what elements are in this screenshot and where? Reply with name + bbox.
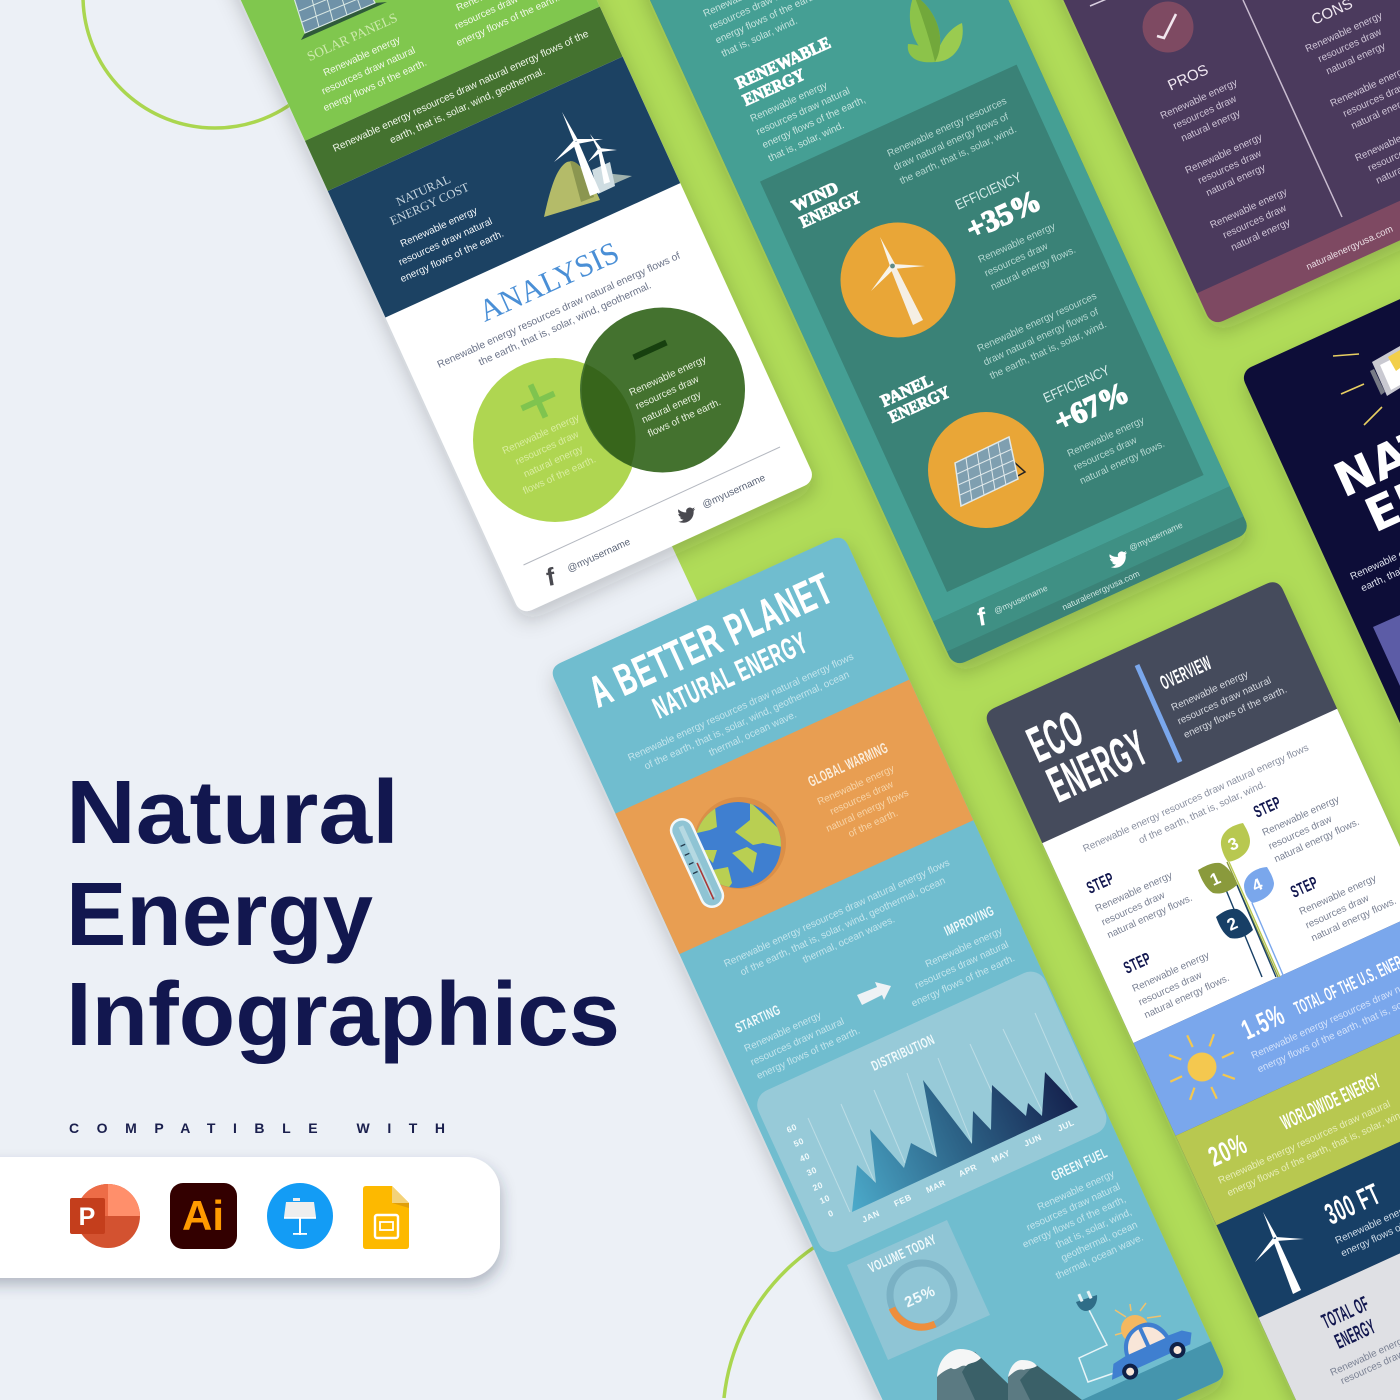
text: inner intro: the earth, that is, solar, wind. — [898, 124, 1019, 187]
step: lower left: natural energy flows. — [1143, 973, 1231, 1021]
heading: natural energy cost: NATURAL — [394, 172, 453, 209]
axis labels: MAY — [990, 1148, 1012, 1165]
text: wind paragraph: natural energy flows. — [989, 245, 1078, 293]
text: green fuel paragraph: geothermal, ocean — [1060, 1220, 1139, 1264]
text: improving paragraph: Renewable energy — [924, 926, 1004, 970]
text: plus: flows of the earth. — [521, 454, 598, 497]
step: top left: Renewable energy — [1094, 870, 1174, 915]
text: warming paragraph: Renewable energy — [816, 763, 896, 808]
title: natural energy infographics: Infographics — [66, 965, 620, 1065]
heading: natural energy cost: ENERGY COST — [388, 180, 472, 228]
block: purple section — [1373, 615, 1400, 686]
subtitle: natural energy: NATURAL ENERGY — [648, 627, 813, 725]
stat: 1.5% total of the U.S. energy: 1.5% — [1237, 999, 1290, 1045]
step: top left: natural energy flows. — [1106, 893, 1194, 941]
chart: volume today donut: VOLUME TODAY — [866, 1231, 939, 1276]
icon: powerpoint: P — [79, 1203, 95, 1231]
chart: volume today donut: 25% — [902, 1282, 938, 1311]
icon: lamp — [1333, 346, 1400, 425]
heading: solar panels: SOLAR PANELS — [305, 10, 400, 64]
panel: purple pros and cons card — [1005, 0, 1400, 326]
axis labels: 60 — [785, 1122, 799, 1135]
chart: venn diagram — [473, 308, 745, 522]
text: dark green band: earth, that is, solar, wind, geothermal. — [388, 66, 547, 146]
icon: wind turbine in orange circle — [840, 222, 956, 338]
title: natural energy infographics: Natural — [66, 763, 399, 863]
icon: sun — [1169, 1034, 1235, 1100]
text: minus: Renewable energy — [628, 354, 708, 399]
text: green fuel paragraph: energy flows of the earth, — [1021, 1194, 1128, 1251]
heading: panel energy: PANEL — [878, 371, 936, 411]
stat: efficiency +35%: EFFICIENCY — [953, 168, 1024, 213]
icon: hill with wind turbines — [544, 112, 632, 217]
text: pros list: Renewable energy — [1209, 187, 1289, 231]
heading: improving: IMPROVING — [942, 902, 996, 939]
axis labels: 0 — [826, 1208, 835, 1219]
text: solar paragraph: Renewable energy — [322, 34, 402, 79]
text: pros list: natural energy — [1229, 217, 1292, 254]
heading: green fuel: GREEN FUEL — [1049, 1144, 1110, 1184]
step: lower left: STEP — [1121, 949, 1154, 978]
text: panel paragraph: resources draw — [1072, 435, 1139, 473]
text: renewable paragraph: that is, solar, wind. — [767, 120, 846, 164]
text: pros list: natural energy — [1180, 108, 1242, 144]
text: renewable paragraph: resources draw natural — [755, 86, 852, 138]
diagram: leaf steps: 3 — [1225, 833, 1242, 855]
text: warming paragraph: natural energy flows — [825, 788, 911, 835]
text: intro: thermal, ocean wave. — [707, 709, 799, 759]
step: right: natural energy flows. — [1310, 896, 1398, 944]
text: pros list: Renewable energy — [1159, 77, 1239, 122]
icon: arrow — [857, 982, 891, 1005]
text: starting paragraph: energy flows of the earth. — [755, 1025, 862, 1082]
diagram: leaf steps: 1 — [1207, 868, 1224, 890]
axis labels: JUL — [1056, 1117, 1076, 1133]
text: green fuel paragraph: Renewable energy — [1036, 1169, 1116, 1213]
text: cons list: natural energy — [1325, 41, 1387, 77]
panel: navy natural energy card — [1240, 206, 1400, 1009]
step: top left: resources draw — [1100, 890, 1167, 928]
axis labels: 50 — [792, 1136, 806, 1149]
text: renewable paragraph: Renewable energy — [749, 80, 829, 125]
text: overview paragraph: energy flows of the earth. — [1182, 684, 1289, 741]
title: eco energy: ECO — [1019, 700, 1092, 773]
stat: efficiency +67%: +67% — [1049, 376, 1134, 438]
heading: global warming: GLOBAL WARMING — [806, 740, 891, 791]
icon: illustrator: Ai — [182, 1192, 224, 1239]
title: eco energy — [1019, 700, 1156, 813]
text: eco intro: of the earth, that is, solar, wind. — [1137, 779, 1268, 847]
text: green fuel paragraph: thermal, ocean wave. — [1054, 1232, 1145, 1282]
icon: electric car with sun and plug — [1076, 1291, 1199, 1387]
title: a better planet: A BETTER PLANET — [582, 564, 841, 717]
text: minus: flows of the earth. — [646, 397, 723, 440]
text: plus: Renewable energy — [501, 412, 581, 457]
icon: check badge — [1142, 2, 1194, 52]
text: panel intro: draw natural energy flows of — [982, 306, 1100, 368]
text: panel intro: Renewable energy resources — [976, 291, 1099, 355]
text: cons list: Renewable energy — [1304, 10, 1384, 55]
text: improving paragraph: energy flows of the earth. — [910, 953, 1017, 1010]
panel: inner dark teal — [760, 65, 1204, 592]
text: wind paragraph: Renewable energy — [977, 221, 1057, 266]
icon: wind turbine — [1255, 1212, 1304, 1294]
text: starting paragraph: resources draw natural — [749, 1016, 846, 1068]
panel: app icons pill — [0, 1157, 500, 1278]
text: plus: resources draw — [514, 429, 581, 468]
text: cost paragraph: Renewable energy — [399, 205, 479, 250]
text: compatible with: COMPATIBLE WITH — [69, 1120, 445, 1136]
heading: analysis: ANALYSIS — [473, 234, 624, 329]
text: panel paragraph: natural energy flows. — [1078, 439, 1167, 487]
footer: teal social links: @myusername — [992, 583, 1049, 616]
text: panel paragraph: Renewable energy — [1066, 415, 1146, 460]
step: top right: Renewable energy — [1261, 794, 1341, 839]
panel: green and white analysis card — [206, 0, 816, 615]
text: green fuel paragraph: that is, solar, wind, — [1054, 1207, 1134, 1251]
step: right: Renewable energy — [1298, 873, 1378, 918]
stat: efficiency +35%: +35% — [961, 184, 1046, 246]
text: minus: natural energy — [640, 390, 703, 426]
axis labels: 40 — [798, 1151, 812, 1164]
step: lower left — [1121, 946, 1231, 1021]
text: dark green band: Renewable energy resources draw natural energy flows of the — [331, 29, 591, 155]
icon: powerpoint — [70, 1184, 140, 1248]
step: top left — [1084, 866, 1194, 941]
text: renewable paragraph: energy flows of the earth, — [761, 95, 867, 151]
icon: illustrator — [170, 1183, 237, 1249]
text: minus: resources draw — [634, 374, 701, 412]
axis labels — [785, 1117, 1076, 1225]
text: cons list: resources draw — [1317, 26, 1384, 65]
icon: leaves — [908, 0, 963, 62]
axis labels: JAN — [860, 1208, 881, 1225]
heading: panel energy: ENERGY — [886, 382, 953, 427]
axis labels: 10 — [818, 1193, 832, 1206]
text: inner intro: draw natural energy flows of — [892, 111, 1010, 173]
icon: snowy mountains — [937, 1349, 1082, 1400]
text: analysis paragraph: the earth, that is, solar, wind, geothermal. — [477, 280, 653, 368]
text: overview paragraph: Renewable energy — [1170, 669, 1250, 714]
text: analysis paragraph: Renewable energy resources draw natural energy flows of — [436, 251, 682, 371]
panel: teal wind and panel energy card — [639, 0, 1251, 667]
stat: 20% worldwide energy: 20% — [1204, 1128, 1252, 1172]
text: website: naturalenergyusa.com — [1305, 224, 1395, 273]
heading: distribution: DISTRIBUTION — [869, 1031, 937, 1074]
text: top paragraph: that is, solar, wind. — [720, 16, 799, 60]
axis labels: FEB — [892, 1192, 913, 1209]
step: top left: STEP — [1084, 869, 1117, 898]
footer: teal social links: @myusername — [1127, 520, 1184, 553]
axis labels: JUN — [1022, 1132, 1043, 1149]
stat: 20% worldwide energy: Renewable energy resources draw natural — [1217, 1099, 1392, 1187]
text: starting paragraph: Renewable energy — [743, 1010, 823, 1055]
text: inner intro: Renewable energy resources — [886, 96, 1009, 160]
stat: 1.5% total of the U.S. energy — [1237, 947, 1400, 1075]
heading: overview: OVERVIEW — [1157, 652, 1215, 695]
footer: social links: @myusername — [566, 536, 633, 575]
text: intro: of the earth, that is, solar, wind, geothermal, ocean — [643, 669, 851, 772]
axis labels: APR — [957, 1162, 979, 1179]
footer: teal social links: naturalenergyusa.com — [1060, 568, 1141, 612]
footer: social links — [544, 472, 768, 592]
step: top right: natural energy flows. — [1273, 817, 1361, 865]
footer: social links: @myusername — [701, 472, 768, 511]
text: solar paragraph: energy flows of the earth. — [322, 58, 429, 114]
icon: google slides — [363, 1186, 409, 1249]
icon: globe and thermometer — [667, 797, 786, 910]
step: top right — [1251, 790, 1361, 865]
heading: pros: PROS — [1165, 61, 1211, 94]
text: warming paragraph: resources draw — [828, 779, 896, 818]
chart: volume today donut — [847, 1220, 990, 1360]
text: pros list: natural energy — [1204, 162, 1267, 199]
heading: wind energy: ENERGY — [797, 187, 864, 232]
chart: distribution area chart — [752, 966, 1112, 1257]
text: green fuel paragraph: resources draw natural — [1025, 1181, 1122, 1234]
text: intro: Renewable energy resources draw natural energy flows — [626, 652, 856, 764]
title: eco energy: ENERGY — [1039, 719, 1156, 813]
heading: renewable energy: ENERGY — [740, 65, 808, 110]
icon: solar panel in orange circle — [928, 412, 1044, 528]
text: pros list: resources draw — [1221, 203, 1289, 241]
text: warming paragraph: of the earth. — [847, 808, 900, 840]
diagram: leaf steps: 2 — [1224, 913, 1241, 935]
heading: total of energy — [1319, 1292, 1379, 1354]
diagram: leaf steps — [1198, 823, 1283, 977]
text: improving paragraph: resources draw natural — [913, 939, 1010, 992]
diagram: leaf steps: 4 — [1249, 874, 1266, 896]
footer: teal social links — [975, 520, 1184, 632]
step: lower left: Renewable energy — [1131, 950, 1211, 995]
stat: efficiency +67%: EFFICIENCY — [1041, 361, 1112, 406]
axis labels: MAR — [924, 1177, 947, 1195]
title: natural energy infographics: Energy — [66, 865, 373, 965]
axis labels: 20 — [811, 1180, 825, 1193]
panel: eco energy card — [987, 582, 1400, 1400]
divider bar — [1137, 665, 1180, 762]
text: overview paragraph: resources draw natural — [1176, 675, 1273, 727]
icon: keynote — [267, 1183, 333, 1249]
text: cost paragraph: energy flows of the earth. — [399, 229, 506, 285]
axis labels: 30 — [805, 1165, 819, 1178]
text: section paragraph: Renewable energy resources draw natural energy flows — [722, 858, 952, 970]
title: natural energy infographics — [66, 763, 620, 1065]
step: right: resources draw — [1304, 893, 1371, 931]
text: panel intro: the earth, that is, solar, wind. — [988, 319, 1109, 382]
text: cost paragraph: resources draw natural — [397, 216, 494, 268]
text: pros list: resources draw — [1196, 148, 1264, 187]
text: solar paragraph: resources draw natural — [320, 45, 417, 97]
heading: wind energy: WIND — [789, 178, 841, 216]
heading: renewable energy: RENEWABLE — [733, 33, 833, 93]
footer: teal social links: f — [975, 603, 989, 632]
text: pros list: resources draw — [1172, 93, 1239, 132]
panel: blue better planet card — [553, 538, 1223, 1400]
footer: social links: f — [544, 563, 558, 592]
step: top right: STEP — [1251, 793, 1284, 822]
icon: solar panel — [293, 0, 387, 40]
stat: 300 ft — [1320, 1178, 1400, 1259]
text: wind paragraph: resources draw — [983, 241, 1050, 279]
text: plus: natural energy — [522, 444, 585, 480]
step: right — [1288, 869, 1398, 944]
stat: 20% worldwide energy — [1204, 1069, 1400, 1200]
heading: starting: STARTING — [733, 1001, 783, 1036]
step: lower left: resources draw — [1137, 970, 1204, 1008]
text: section paragraph: thermal, ocean waves. — [801, 914, 897, 966]
step: top right: resources draw — [1267, 814, 1334, 852]
text: pros list: Renewable energy — [1184, 132, 1264, 177]
step: right: STEP — [1288, 873, 1321, 902]
text: eco intro: Renewable energy resources draw natural energy flows — [1081, 743, 1311, 855]
text: section paragraph: of the earth, that is, solar, wind, geothermal, ocean — [739, 875, 947, 978]
